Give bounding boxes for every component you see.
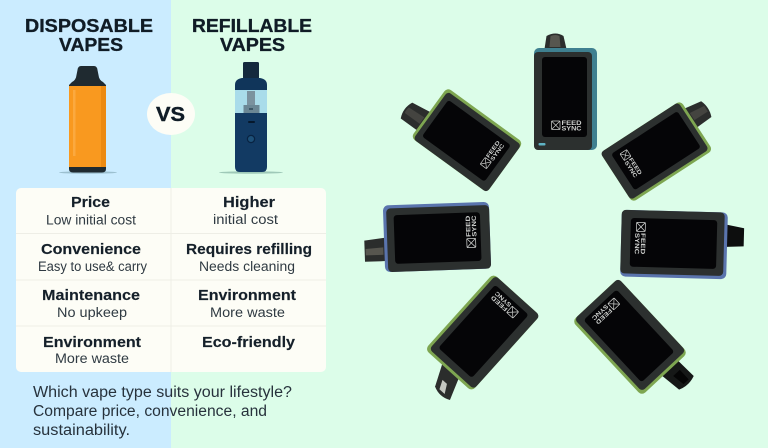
device: middle right blue	[620, 210, 745, 280]
device: lower right green: FEED	[593, 307, 613, 325]
row: price: initial cost	[213, 212, 278, 227]
heading: refillable vapes	[192, 15, 312, 55]
device: upper right green: FEED	[627, 157, 642, 176]
device: top teal: SYNC	[562, 126, 582, 132]
row: convenience: Requires refilling	[186, 241, 312, 258]
heading: disposable vapes: VAPES	[59, 34, 123, 55]
row: environment: Environment	[43, 334, 141, 351]
device: middle right blue: SYNC	[633, 233, 640, 255]
row: maintenance	[42, 287, 296, 320]
device: middle left blue	[363, 202, 491, 273]
row: environment: Eco-friendly	[202, 334, 296, 351]
panel: refillable background	[171, 0, 768, 448]
device: lower right green	[572, 278, 704, 413]
device: top teal	[534, 34, 597, 150]
heading: disposable vapes: DISPOSABLE	[25, 15, 153, 36]
device: upper right green	[600, 90, 729, 202]
row: price	[46, 194, 278, 228]
text block: closing question	[33, 384, 292, 439]
row: environment: More waste	[55, 351, 129, 366]
row: price: Higher	[223, 194, 275, 211]
device: upper left green	[393, 75, 523, 193]
device: middle right blue: FEED	[639, 233, 646, 255]
row: price: Low initial cost	[46, 212, 136, 228]
badge: VS	[147, 93, 195, 135]
device: lower left green	[409, 274, 540, 409]
heading: refillable vapes: VAPES	[220, 34, 285, 55]
device: lower left green: SYNC	[494, 289, 513, 307]
heading: disposable vapes	[25, 15, 153, 55]
icon: refillable vape	[219, 62, 283, 174]
icon: disposable vape	[59, 66, 117, 174]
row: maintenance: Maintenance	[42, 287, 140, 304]
heading: refillable vapes: REFILLABLE	[192, 15, 312, 36]
row: convenience: Convenience	[41, 241, 141, 258]
text block: closing question: Compare price, convenience, and	[33, 403, 267, 420]
row: convenience	[38, 241, 312, 274]
text block: closing question: sustainability.	[33, 422, 130, 439]
badge: VS: VS	[156, 104, 185, 126]
device: upper right green: SYNC	[623, 160, 638, 179]
device: upper left green: SYNC	[490, 143, 506, 162]
device: middle left blue: FEED	[465, 215, 473, 237]
row: convenience: Needs cleaning	[199, 259, 295, 274]
device: lower left green: FEED	[490, 293, 509, 312]
row: convenience: Easy to use& carry	[38, 259, 147, 274]
row: maintenance: Environment	[198, 287, 296, 304]
text block: closing question: Which vape type suits your lifestyle?	[33, 384, 292, 401]
row: environment	[43, 334, 296, 366]
panel: disposable background	[0, 0, 171, 448]
device: middle left blue: SYNC	[471, 215, 479, 237]
device: upper left green: FEED	[486, 140, 502, 159]
comparison table	[16, 188, 326, 372]
device: top teal: FEED	[562, 121, 582, 127]
row: price: Price	[71, 194, 110, 211]
row: maintenance: No upkeep	[57, 305, 127, 320]
device: lower right green: SYNC	[589, 303, 609, 321]
row: maintenance: More waste	[210, 305, 285, 320]
